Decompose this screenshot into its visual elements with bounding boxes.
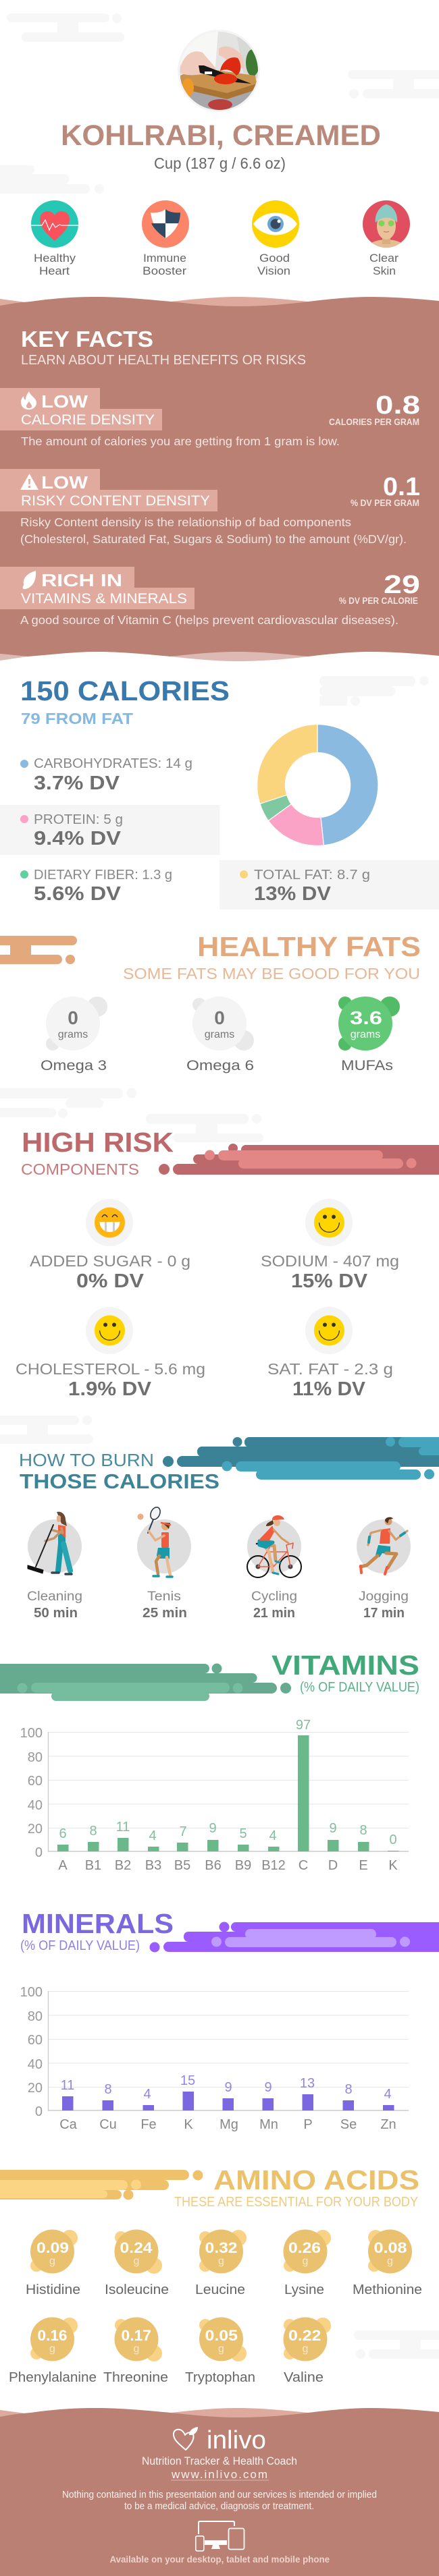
- amino: lysine: Lysine: [284, 2283, 324, 2297]
- donut chart: [257, 725, 378, 845]
- bar chart: vitamins: 97: [296, 1718, 311, 1733]
- decorative banner: amino acids: [0, 2170, 203, 2200]
- activity: cleaning: [27, 1512, 82, 1621]
- amino: threonine: g: [134, 2343, 139, 2355]
- bar chart: vitamins: 4: [149, 1828, 157, 1843]
- macro: protein: [20, 812, 123, 849]
- bar chart: vitamins: 7: [179, 1824, 187, 1839]
- risk: added sugar: ADDED SUGAR - 0 g: [30, 1252, 190, 1270]
- bar chart: minerals: 20: [28, 2081, 43, 2096]
- icon: devices: [196, 2521, 244, 2551]
- risk: saturated fat: SAT. FAT - 2.3 g: [267, 1360, 393, 1378]
- fat: omega 6: Omega 6: [186, 1058, 254, 1073]
- fat: omega 6: grams: [205, 1029, 234, 1040]
- amino: histidine: g: [49, 2256, 55, 2267]
- bar chart: minerals: 8: [104, 2082, 112, 2097]
- bar chart: minerals: 0: [35, 2104, 43, 2119]
- bar chart: vitamins: B6: [205, 1858, 222, 1873]
- bar chart: vitamins: D: [328, 1858, 338, 1873]
- serving size: Cup (187 g / 6.6 oz): [154, 155, 286, 172]
- icon: clear skin: [363, 200, 410, 248]
- decorative banner: high risk: [159, 1144, 439, 1175]
- bar chart: minerals: Fe: [140, 2117, 157, 2132]
- panel: healthy fats: [0, 931, 421, 1073]
- macro: dietary fiber: DIETARY FIBER: 1.3 g: [34, 868, 172, 883]
- bar chart: vitamins: 80: [28, 1750, 43, 1765]
- panel: high risk components: [16, 1127, 439, 1400]
- amino: leucine: g: [218, 2256, 224, 2267]
- fat: mufas: 3.6: [350, 1007, 382, 1028]
- subheading: (% OF DAILY VALUE): [20, 1938, 140, 1953]
- bar chart: minerals: [20, 1985, 409, 2132]
- bar chart: minerals: 9: [224, 2080, 232, 2095]
- panel: how to burn those calories: [19, 1437, 439, 1621]
- bar chart: vitamins: 6: [59, 1826, 67, 1841]
- amino: valine: [284, 2317, 331, 2385]
- fat: mufas: grams: [351, 1029, 380, 1040]
- activity: cycling: [247, 1515, 301, 1621]
- amino: methionine: g: [387, 2256, 393, 2267]
- panel: calories: [0, 675, 439, 909]
- disclaimer: to be a medical advice, diagnosis or treatment.: [124, 2501, 314, 2512]
- amino: valine: g: [303, 2343, 308, 2355]
- bar chart: vitamins: 5: [239, 1826, 247, 1841]
- amino: histidine: [26, 2229, 80, 2297]
- risk: saturated fat: [267, 1307, 393, 1400]
- panel: vitamins: [0, 1650, 419, 1873]
- bar chart: minerals: K: [184, 2117, 193, 2132]
- bar chart: minerals: P: [303, 2117, 313, 2132]
- benefit labels: [34, 252, 398, 277]
- icon: healthy heart: [31, 200, 78, 248]
- amino: phenylalanine: Phenylalanine: [9, 2370, 97, 2385]
- amino: isoleucine: [105, 2229, 169, 2297]
- macro: dietary fiber: 5.6% DV: [34, 883, 122, 905]
- amino: threonine: [103, 2317, 168, 2385]
- risk: added sugar: [30, 1199, 190, 1292]
- bar chart: minerals: 8: [344, 2082, 353, 2097]
- fat: omega 3: grams: [58, 1029, 88, 1040]
- bar chart: vitamins: B5: [174, 1858, 190, 1873]
- tagline: Nutrition Tracker & Health Coach: [142, 2455, 297, 2467]
- amino: histidine: 0.09: [36, 2239, 69, 2256]
- fat: omega 6: [186, 997, 254, 1073]
- heading: how to burn: HOW TO BURN: [19, 1450, 154, 1470]
- bar chart: vitamins: 8: [89, 1824, 97, 1839]
- fact: risky content density: RISKY CONTENT DENSITY: [21, 493, 210, 509]
- heading: those calories: THOSE CALORIES: [20, 1469, 220, 1493]
- bar chart: minerals: 4: [384, 2087, 392, 2102]
- macro: total fat: 13% DV: [254, 883, 332, 905]
- activity: cleaning: Cleaning: [27, 1590, 82, 1604]
- panel: minerals: [20, 1908, 439, 2132]
- bar chart: vitamins: C: [299, 1858, 308, 1873]
- icon: immune booster: [142, 200, 189, 248]
- bar chart: minerals: 9: [264, 2080, 272, 2095]
- activity: jogging: [357, 1517, 411, 1621]
- bar chart: vitamins: K: [388, 1858, 398, 1873]
- bar chart: minerals: Cu: [99, 2117, 117, 2132]
- risk: sodium: SODIUM - 407 mg: [261, 1252, 399, 1270]
- amino: phenylalanine: g: [49, 2343, 55, 2355]
- macro: total fat: [240, 868, 370, 905]
- risk: cholesterol: CHOLESTEROL - 5.6 mg: [16, 1360, 205, 1378]
- icon: tennis player: [138, 1506, 172, 1577]
- amino: threonine: Threonine: [103, 2370, 168, 2385]
- amino: tryptophan: [185, 2317, 255, 2385]
- fact: calorie density: 0.8: [376, 391, 420, 420]
- activity: tennis: 25 min: [143, 1606, 187, 1621]
- bar chart: vitamins: B12: [261, 1858, 286, 1873]
- icon: good vision: [252, 200, 299, 248]
- bar chart: minerals: Mg: [220, 2117, 238, 2132]
- heading: amino acids: AMINO ACIDS: [213, 2164, 419, 2195]
- activity: jogging: Jogging: [359, 1590, 409, 1604]
- amino: valine: Valine: [284, 2370, 324, 2385]
- macro: dietary fiber: [20, 868, 172, 905]
- logo: inlivo: inlivo: [207, 2426, 266, 2455]
- panel: key facts: [0, 297, 439, 661]
- logo: inlivo: [174, 2426, 266, 2455]
- benefit labels: Clear: [369, 252, 398, 264]
- bar chart: vitamins: 40: [28, 1798, 43, 1813]
- bar chart: minerals: 60: [28, 2033, 43, 2048]
- fact: rich in vitamins and minerals: RICH IN: [41, 570, 122, 590]
- decorative banner: burn: [163, 1437, 439, 1480]
- amino: tryptophan: 0.05: [205, 2327, 238, 2344]
- benefit labels: Heart: [39, 264, 70, 277]
- macro: carbohydrates: [20, 756, 192, 794]
- amino: phenylalanine: 0.16: [38, 2327, 68, 2344]
- amino: lysine: 0.26: [288, 2239, 321, 2256]
- decorative banner: healthy fats: [0, 936, 77, 964]
- icon: person sweeping: [28, 1512, 72, 1574]
- benefit labels: Healthy: [34, 252, 76, 264]
- fact: rich in vitamins and minerals: VITAMINS & MINERALS: [21, 591, 187, 607]
- bar chart: vitamins: 9: [329, 1821, 337, 1836]
- heading: vitamins: VITAMINS: [272, 1650, 419, 1681]
- activity: tennis: Tenis: [147, 1590, 181, 1604]
- risk: cholesterol: [16, 1307, 205, 1400]
- fact: rich in vitamins and minerals: 29: [384, 571, 420, 599]
- health benefit icons: [31, 200, 410, 277]
- fact: risky content density: (Cholesterol, Saturated Fat, Sugars & Sodium) to the amount (%DV/gr).: [20, 532, 407, 546]
- benefit labels: Skin: [373, 264, 396, 277]
- benefit labels: Vision: [257, 264, 290, 277]
- fat: mufas: [338, 997, 400, 1073]
- bar chart: vitamins: 4: [269, 1828, 277, 1843]
- subheading: SOME FATS MAY BE GOOD FOR YOU: [123, 965, 420, 982]
- activity: cycling: 21 min: [253, 1606, 295, 1621]
- title: KOHLRABI, CREAMED: [61, 119, 381, 152]
- bar chart: minerals: Mn: [259, 2117, 278, 2132]
- amino: histidine: Histidine: [26, 2283, 80, 2297]
- macro: carbohydrates: 3.7% DV: [34, 773, 120, 794]
- macro: total fat: TOTAL FAT: 8.7 g: [254, 868, 370, 883]
- fact: rich in vitamins and minerals: A good source of Vitamin C (helps prevent cardiovascular diseases).: [20, 613, 398, 627]
- risk: saturated fat: 11% DV: [292, 1378, 366, 1400]
- bar chart: minerals: 40: [28, 2057, 43, 2072]
- amino: isoleucine: Isoleucine: [105, 2283, 169, 2297]
- activity: cycling: Cycling: [251, 1590, 297, 1604]
- bar chart: vitamins: B1: [85, 1858, 101, 1873]
- heading: high risk: HIGH RISK: [22, 1127, 174, 1158]
- bar chart: vitamins: 8: [359, 1823, 367, 1838]
- amino: isoleucine: 0.24: [120, 2239, 153, 2256]
- fact: calorie density: [0, 388, 420, 448]
- activity: jogging: 17 min: [363, 1606, 405, 1621]
- fact: calorie density: LOW: [41, 391, 88, 412]
- decorative banner: vitamins: [0, 1664, 291, 1701]
- bar chart: minerals: 80: [28, 2009, 43, 2024]
- disclaimer: Nothing contained in this presentation and our services is intended or implied: [62, 2490, 377, 2500]
- amino: tryptophan: Tryptophan: [185, 2370, 255, 2385]
- bar chart: vitamins: 60: [28, 1774, 43, 1789]
- activity: cleaning: 50 min: [34, 1606, 78, 1621]
- bar chart: minerals: Ca: [59, 2117, 78, 2132]
- icon: warning: [20, 474, 38, 490]
- amino: isoleucine: g: [134, 2256, 139, 2267]
- bar chart: vitamins: B2: [115, 1858, 131, 1873]
- fact: calorie density: CALORIE DENSITY: [21, 412, 155, 428]
- fact: calorie density: The amount of calories you are getting from 1 gram is low.: [21, 435, 340, 448]
- bar chart: vitamins: 11: [116, 1820, 130, 1835]
- bar chart: minerals: Se: [340, 2117, 357, 2132]
- activity: tennis: [137, 1506, 191, 1621]
- amino: methionine: 0.08: [374, 2239, 407, 2256]
- amino: valine: 0.22: [288, 2327, 321, 2344]
- fact: risky content density: 0.1: [383, 473, 420, 501]
- panel: footer: [0, 2408, 439, 2576]
- subheading: (% OF DAILY VALUE): [300, 1680, 419, 1695]
- fact: calorie density: CALORIES PER GRAM: [329, 417, 419, 427]
- amino: leucine: [195, 2229, 247, 2297]
- icon: runner: [361, 1517, 407, 1574]
- icon: flame: [21, 391, 36, 410]
- heading: key facts: KEY FACTS: [21, 327, 153, 352]
- subheading: LEARN ABOUT HEALTH BENEFITS OR RISKS: [21, 353, 306, 368]
- bar chart: vitamins: 0: [35, 1845, 43, 1860]
- subheading: THESE ARE ESSENTIAL FOR YOUR BODY: [174, 2195, 418, 2210]
- bar chart: vitamins: 9: [209, 1821, 217, 1836]
- fat: omega 3: [41, 997, 107, 1073]
- amino: lysine: [284, 2229, 331, 2297]
- amino: threonine: 0.17: [122, 2327, 151, 2344]
- risk: added sugar: 0% DV: [76, 1270, 145, 1292]
- bar chart: minerals: 11: [61, 2078, 74, 2093]
- bar chart: vitamins: [20, 1718, 409, 1873]
- amino: methionine: [353, 2229, 422, 2297]
- icon: leaf: [23, 571, 36, 589]
- benefit labels: Good: [259, 252, 290, 264]
- amino: phenylalanine: [9, 2317, 97, 2385]
- amino: methionine: Methionine: [353, 2283, 422, 2297]
- risk: cholesterol: 1.9% DV: [68, 1378, 152, 1400]
- icon: cyclist: [247, 1515, 301, 1577]
- fact: rich in vitamins and minerals: [0, 567, 420, 627]
- bar chart: vitamins: 0: [389, 1832, 397, 1847]
- fat: omega 6: 0: [214, 1007, 225, 1028]
- fat: omega 3: Omega 3: [41, 1058, 107, 1073]
- fact: risky content density: [0, 469, 420, 546]
- disclaimer: [62, 2490, 377, 2512]
- fat: omega 3: 0: [68, 1007, 78, 1028]
- fact: risky content density: LOW: [41, 472, 88, 493]
- heading: minerals: MINERALS: [22, 1908, 174, 1939]
- benefit labels: Booster: [143, 264, 186, 277]
- bar chart: vitamins: A: [58, 1858, 68, 1873]
- fat: mufas: MUFAs: [341, 1058, 393, 1073]
- fact: rich in vitamins and minerals: % DV PER CALORIE: [339, 596, 418, 606]
- website: www.inlivo.com: [171, 2468, 267, 2481]
- fact: risky content density: % DV PER GRAM: [351, 498, 419, 508]
- macro: protein: 9.4% DV: [34, 828, 122, 849]
- bar chart: minerals: 100: [20, 1985, 43, 2000]
- bar chart: minerals: 13: [300, 2076, 315, 2091]
- risk: sodium: 15% DV: [291, 1270, 368, 1292]
- benefit labels: Immune: [143, 252, 186, 264]
- heading: healthy fats: HEALTHY FATS: [197, 931, 421, 962]
- panel: amino acids: [0, 2164, 422, 2385]
- availability note: Available on your desktop, tablet and mobile phone: [109, 2554, 330, 2565]
- bar chart: minerals: 15: [180, 2073, 195, 2088]
- subheading: from fat: 79 FROM FAT: [21, 710, 133, 727]
- bar chart: vitamins: E: [359, 1858, 368, 1873]
- bar chart: vitamins: B9: [235, 1858, 251, 1873]
- decorative banner: minerals: [150, 1922, 439, 1953]
- risk: sodium: [261, 1199, 399, 1292]
- food photo: [178, 30, 260, 112]
- amino: leucine: 0.32: [205, 2239, 238, 2256]
- subheading: components: COMPONENTS: [21, 1160, 139, 1178]
- bar chart: minerals: 4: [143, 2087, 151, 2102]
- bar chart: vitamins: B3: [145, 1858, 161, 1873]
- amino: lysine: g: [303, 2256, 308, 2267]
- bar chart: minerals: Zn: [380, 2117, 396, 2132]
- macro: carbohydrates: CARBOHYDRATES: 14 g: [34, 756, 192, 771]
- amino: leucine: Leucine: [195, 2283, 245, 2297]
- heading: 150 calories: 150 CALORIES: [20, 675, 230, 706]
- bar chart: vitamins: 20: [28, 1822, 43, 1837]
- macro: protein: PROTEIN: 5 g: [34, 812, 123, 827]
- fact: risky content density: Risky Content density is the relationship of bad components: [20, 515, 351, 529]
- bar chart: vitamins: 100: [20, 1726, 43, 1741]
- amino: tryptophan: g: [218, 2343, 224, 2355]
